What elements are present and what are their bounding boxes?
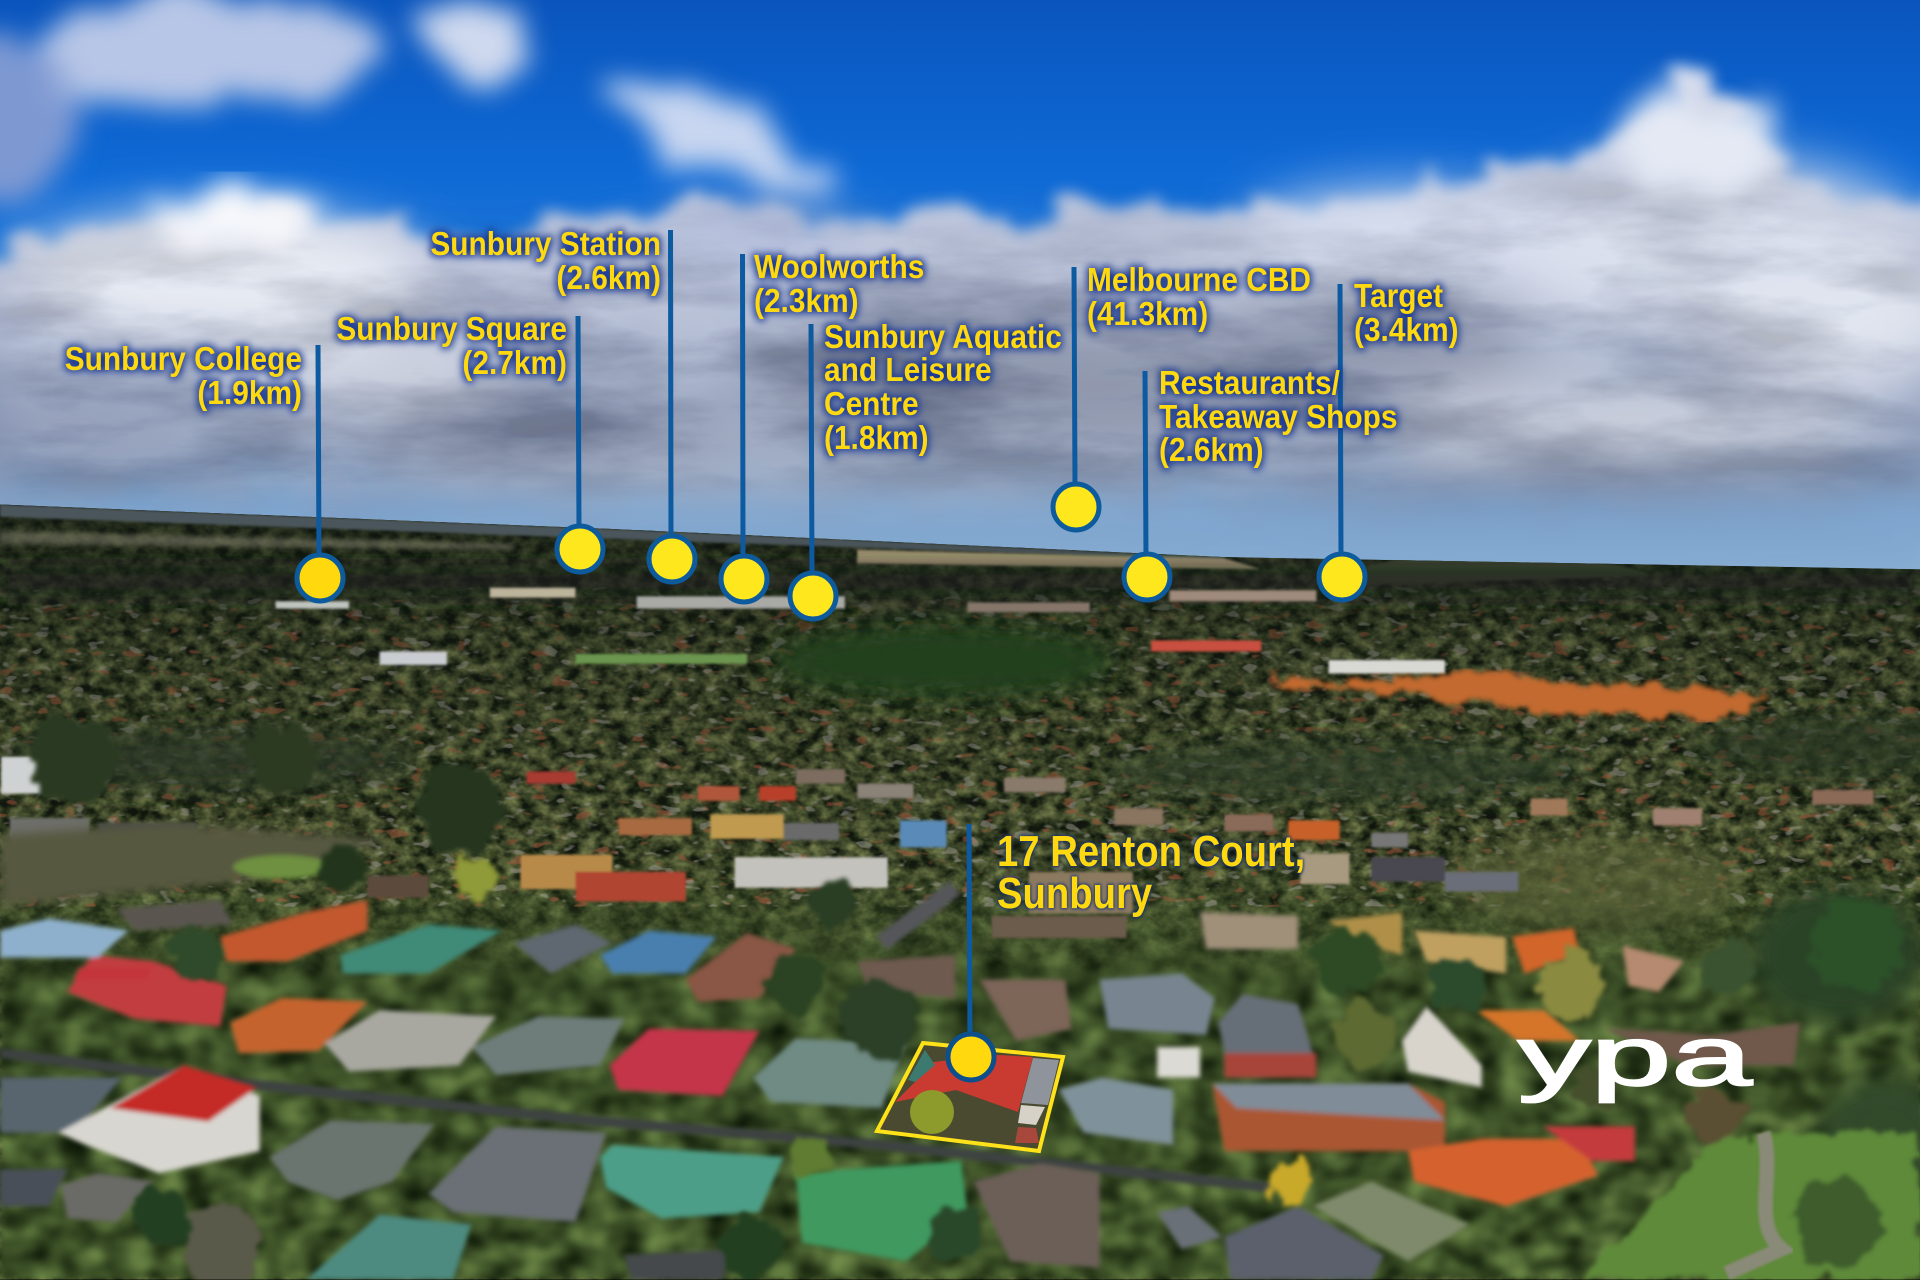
pin: Restaurants and Takeaway Shops: [1124, 371, 1170, 600]
label: Sunbury Station: [430, 226, 661, 296]
roads: [0, 888, 1273, 1188]
label: Sunbury Aquatic and Leisure Centre: (1.8km): [824, 420, 929, 456]
foreground trees: [29, 715, 1902, 1280]
label: Woolworths: Woolworths: [754, 249, 924, 285]
pin: Target: [1319, 284, 1365, 600]
label: Target: (3.4km): [1354, 312, 1459, 348]
label: Sunbury Square: [336, 311, 567, 381]
pin: Sunbury College: [297, 345, 343, 601]
pin: Melbourne CBD: [1053, 267, 1099, 530]
label: 17 Renton Court, Sunbury: [997, 827, 1305, 918]
pin: Sunbury Aquatic and Leisure Centre: [790, 324, 836, 619]
label: Restaurants and Takeaway Shops: (2.6km): [1159, 432, 1264, 468]
label: Sunbury Square: Sunbury Square: [336, 311, 567, 347]
label: Restaurants and Takeaway Shops: Restaurants/: [1159, 365, 1340, 401]
label: Sunbury Aquatic and Leisure Centre: Sunbury Aquatic: [824, 319, 1062, 355]
subject property: 17 Renton Court: [877, 1043, 1063, 1151]
label: Restaurants and Takeaway Shops: [1159, 365, 1397, 468]
town buildings on the horizon: [276, 588, 1445, 673]
pin: 17 Renton Court: [948, 824, 994, 1080]
label: Woolworths: (2.3km): [754, 283, 859, 319]
photo backdrop: suburb ground: [0, 502, 1920, 1280]
label: Sunbury Aquatic and Leisure Centre: Centre: [824, 386, 919, 422]
label: Woolworths: [754, 249, 924, 319]
label: Sunbury Station: (2.6km): [556, 260, 661, 296]
lawn and footpath at lower right: [1580, 1133, 1920, 1280]
label: Melbourne CBD: Melbourne CBD: [1087, 262, 1311, 298]
label: Sunbury Square: (2.7km): [462, 345, 567, 381]
park with oval and car park: [0, 823, 392, 906]
pin: Sunbury Square: [557, 316, 603, 572]
label: Sunbury College: Sunbury College: [65, 341, 302, 377]
pin: Sunbury Station: [649, 230, 695, 582]
label: Sunbury College: [65, 341, 302, 411]
label: Sunbury Station: Sunbury Station: [430, 226, 661, 262]
label: Target: [1354, 278, 1459, 348]
logo: ypa: ypa: [1518, 1009, 1752, 1103]
label: Sunbury Aquatic and Leisure Centre: [824, 319, 1062, 456]
near houses: [0, 900, 1800, 1280]
pin: Woolworths: [721, 254, 767, 602]
label: Restaurants and Takeaway Shops: Takeaway Shops: [1159, 399, 1397, 435]
label: 17 Renton Court, Sunbury: 17 Renton Court,: [997, 827, 1305, 876]
label: Target: Target: [1354, 278, 1444, 314]
label: 17 Renton Court, Sunbury: Sunbury: [997, 869, 1152, 918]
photo backdrop: sky and clouds: [0, 0, 1920, 588]
orange roofs cluster: [1261, 671, 1763, 720]
label: Melbourne CBD: (41.3km): [1087, 296, 1208, 332]
label: Sunbury Aquatic and Leisure Centre: and Leisure: [824, 352, 992, 388]
label: Melbourne CBD: [1087, 262, 1311, 332]
label: Sunbury College: (1.9km): [197, 375, 302, 411]
mid-distance roofs: [1, 757, 1873, 938]
